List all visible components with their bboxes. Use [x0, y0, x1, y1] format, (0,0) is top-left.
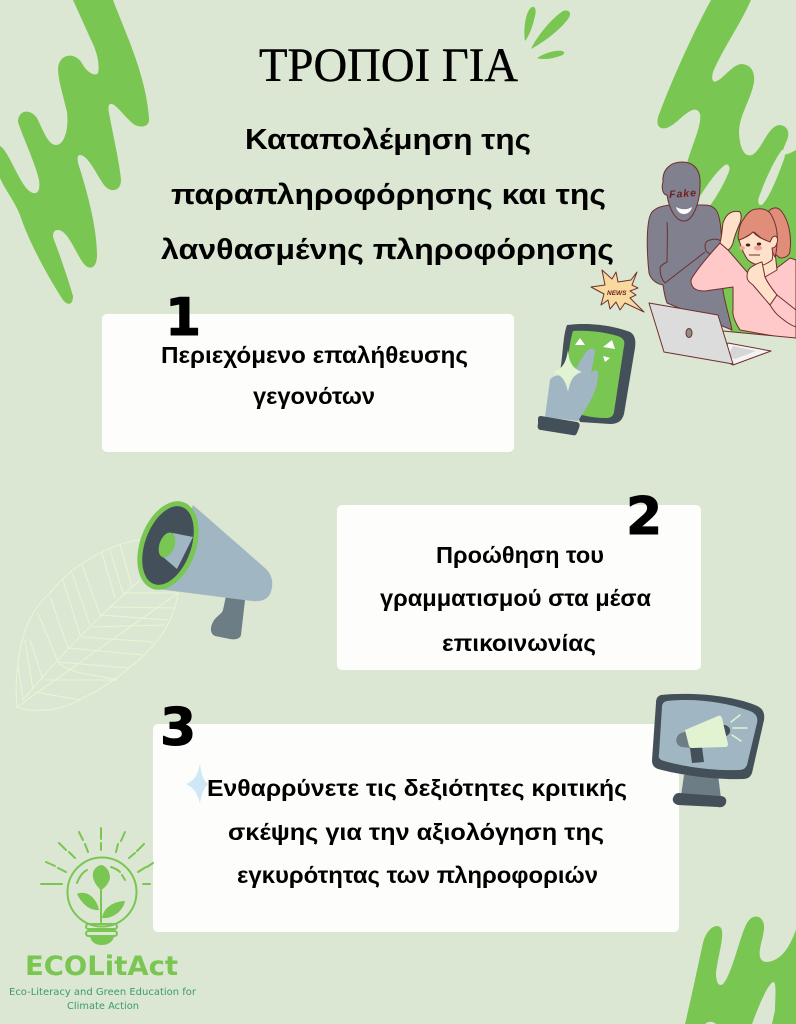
card 3 text: σκέψης για την αξιολόγηση της — [228, 819, 604, 845]
icon: monitor with megaphone — [652, 694, 764, 807]
table edge — [723, 331, 796, 345]
card 2 text: γραμματισμού στα μέσα — [380, 585, 651, 611]
card 1 text: γεγονότων — [253, 383, 375, 409]
decorative green blob: top right — [658, 0, 796, 340]
decorative green blob: top left — [0, 0, 149, 304]
card 1 text — [161, 342, 468, 409]
news burst — [591, 270, 644, 312]
laptop — [649, 303, 771, 365]
shadow figure: Fake — [669, 187, 697, 201]
logo tagline — [9, 987, 197, 1012]
icon: tablet with hand — [538, 324, 635, 435]
card 3 text: εγκυρότητας των πληροφοριών — [237, 862, 598, 888]
logo: ECOLitAct light bulb — [9, 828, 197, 1012]
card 2 text: επικοινωνίας — [442, 630, 596, 656]
subtitle: λανθασμένης πληροφόρησης — [161, 234, 614, 266]
decorative sparkle next to title — [524, 7, 570, 59]
icon: megaphone — [126, 493, 272, 639]
woman — [691, 208, 796, 340]
card 3 text — [207, 775, 627, 888]
number 1: 1 — [165, 288, 201, 348]
news burst: NEWS — [607, 290, 627, 297]
panel: card 3 — [153, 698, 679, 932]
decorative green blob: bottom right — [685, 916, 796, 1024]
icon: blue sparkle — [186, 763, 208, 804]
card 2 text — [380, 542, 651, 656]
logo wordmark: ECOLitAct — [25, 951, 178, 982]
card 1 text: Περιεχόμενο επαλήθευσης — [161, 342, 468, 368]
shadow figure — [647, 162, 732, 330]
logo tagline: Climate Action — [67, 1001, 139, 1012]
subtitle: Καταπολέμηση της — [245, 124, 531, 156]
panel: card 2 — [337, 487, 701, 670]
title: ΤΡΟΠΟΙ ΓΙΑ — [259, 39, 518, 92]
number 3: 3 — [160, 698, 196, 758]
leaf outline behind megaphone — [16, 540, 178, 710]
panel: card 1 — [102, 288, 514, 452]
logo tagline: Eco-Literacy and Green Education for — [9, 987, 197, 998]
subtitle: παραπληροφόρησης και της — [171, 179, 606, 211]
illustration: fake news figure and worried woman — [591, 162, 796, 365]
card 3 text: Ενθαρρύνετε τις δεξιότητες κριτικής — [207, 775, 627, 801]
subtitle — [161, 124, 614, 266]
card 2 text: Προώθηση του — [436, 542, 604, 568]
number 2: 2 — [626, 487, 662, 547]
